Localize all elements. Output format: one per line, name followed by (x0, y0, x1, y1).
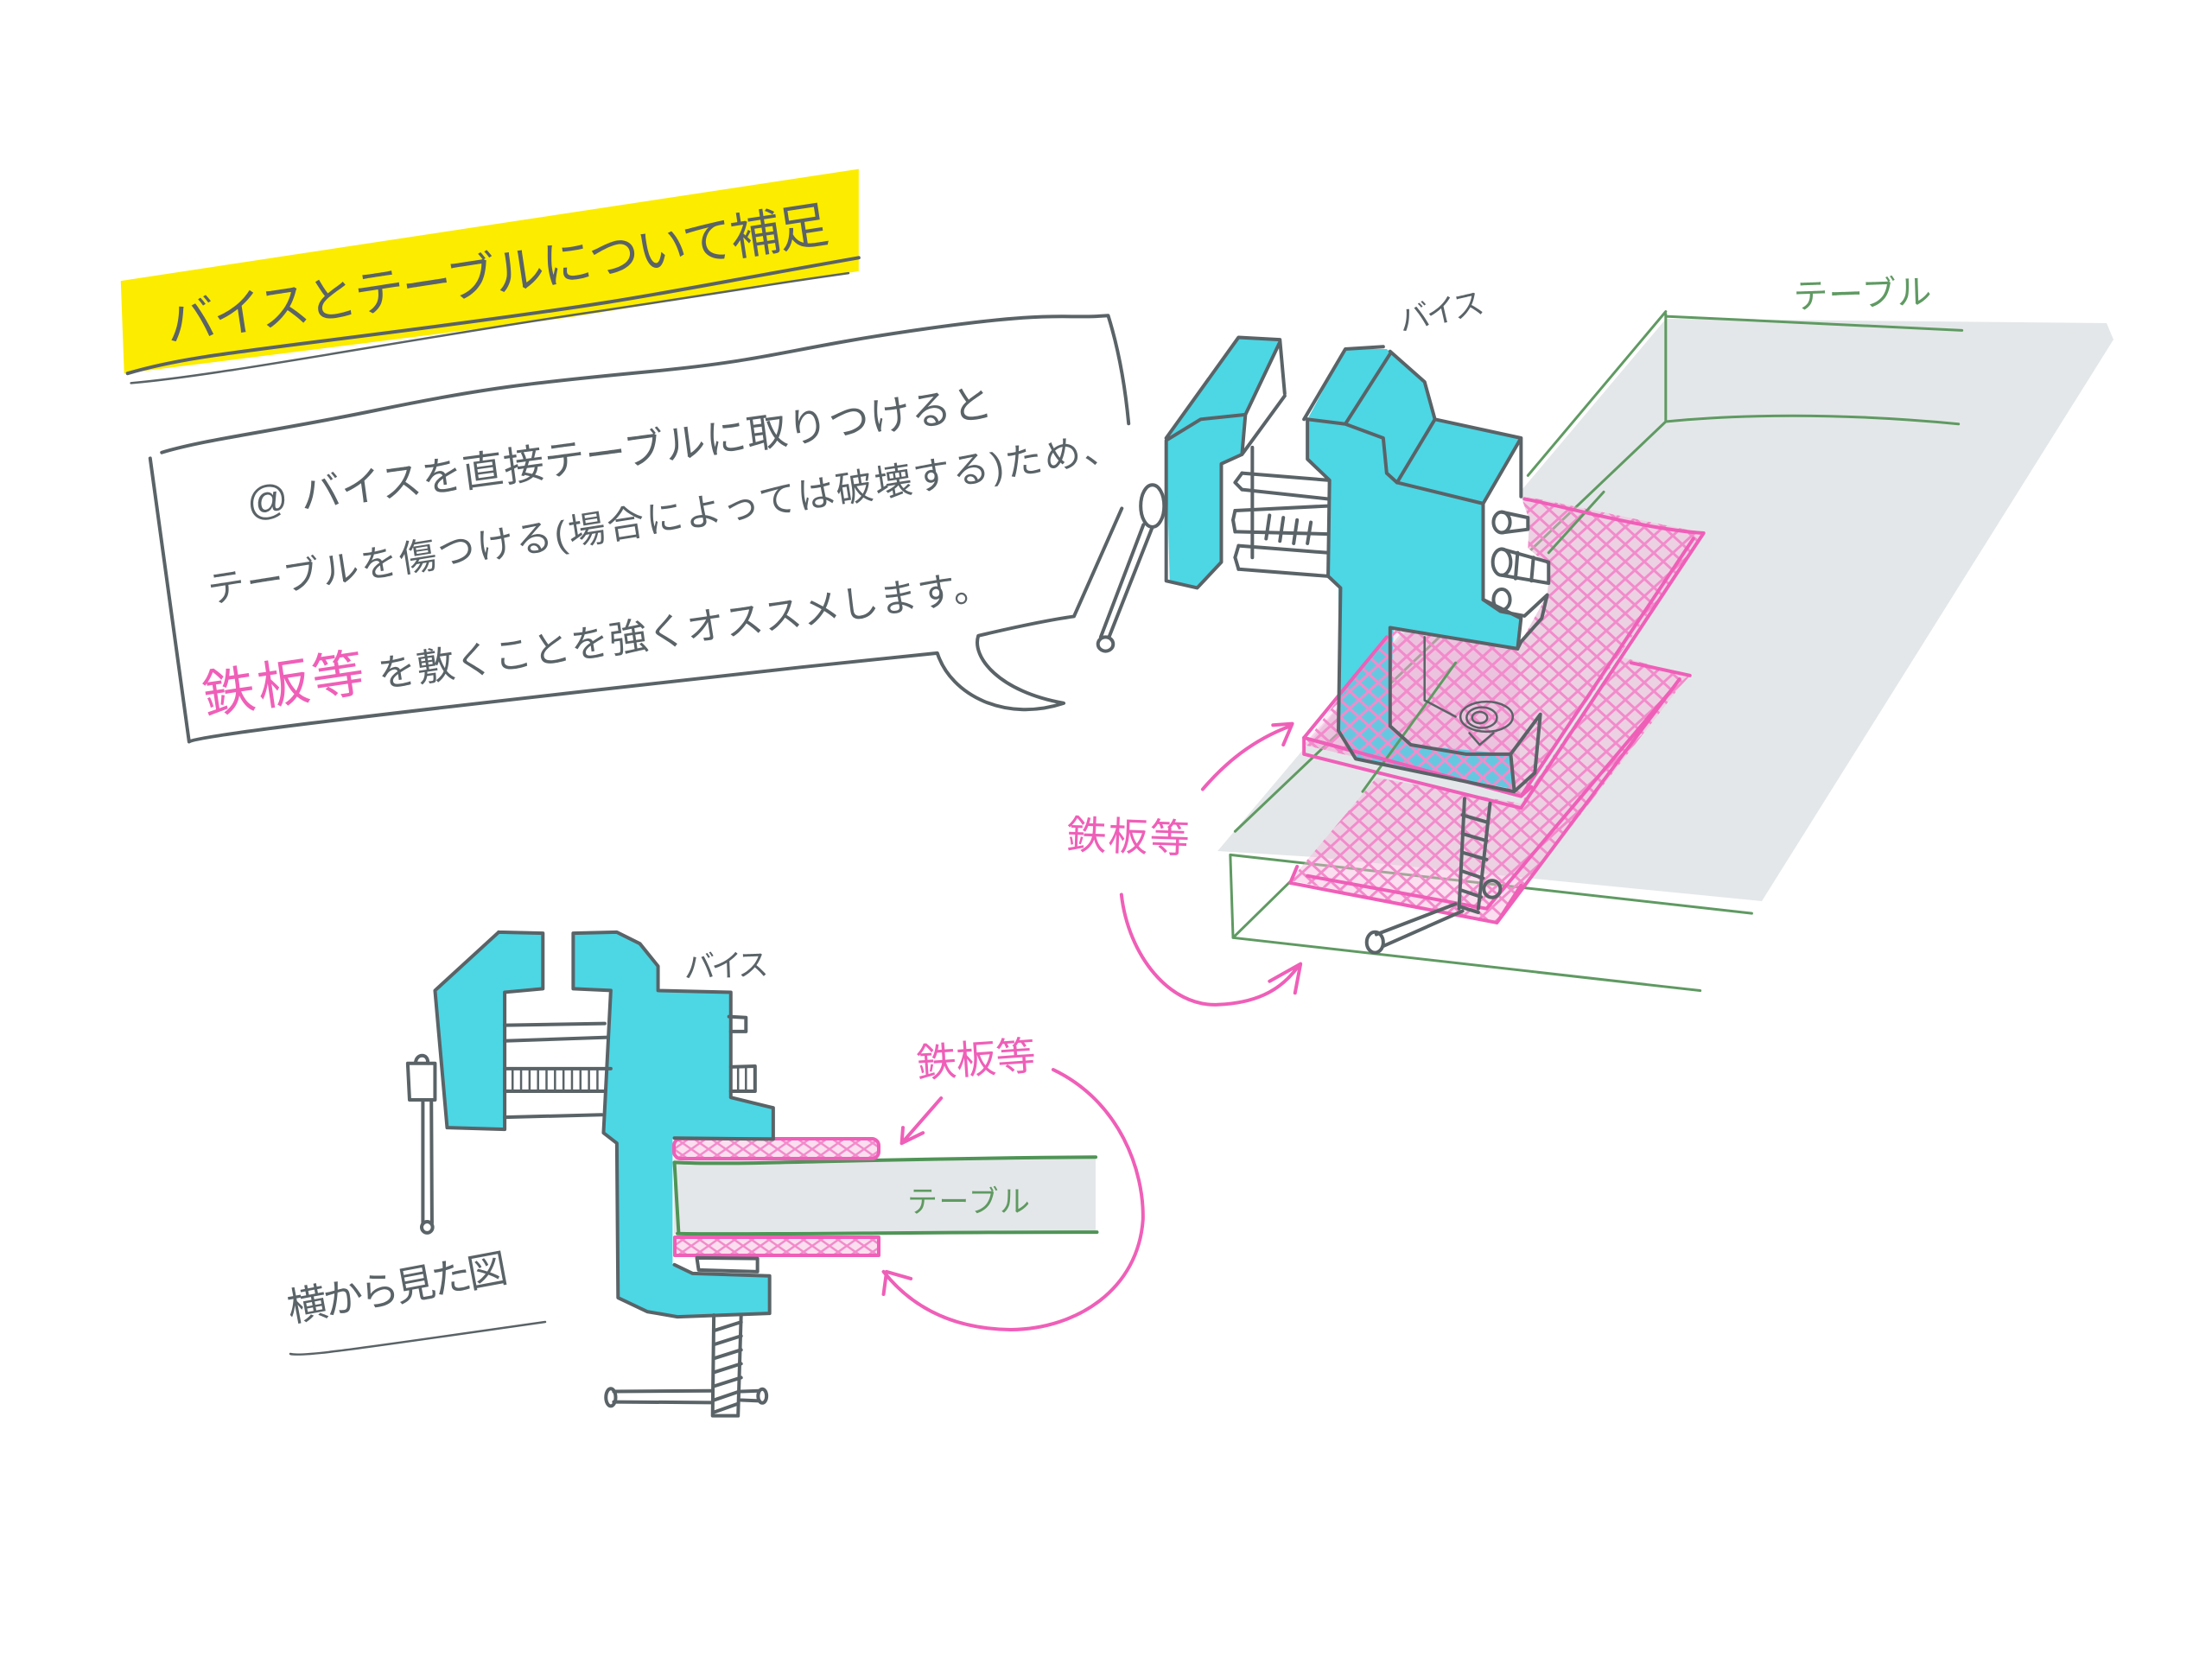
body line 3: を敷くことを強くオススメします。 (375, 564, 994, 696)
side view illustration (283, 932, 1143, 1416)
side view label: vise: バイス (683, 947, 769, 985)
side view vise body (435, 932, 773, 1317)
body line 1: @ バイスを直接テーブルに取りつけると (244, 379, 995, 525)
handle of moving jaw (1098, 485, 1164, 651)
perspective illustration: vise on table (1066, 273, 2113, 1005)
speech bubble with explanation (150, 315, 1128, 742)
label: table: テーブル (1793, 273, 1932, 316)
label: steel plate: 鉄板等 (1066, 812, 1190, 861)
hatch over lower jaw (1304, 630, 1531, 797)
table surface (1217, 319, 2113, 901)
label: vise: バイス (1395, 284, 1487, 339)
heading band: yellow title (121, 169, 859, 383)
side view upper plate (674, 1139, 879, 1160)
bubble outline (150, 315, 1128, 742)
thin inner lines and wing nut (1425, 637, 1513, 745)
bolts (1493, 512, 1510, 532)
side view thread marks (512, 1067, 746, 1091)
side view handle (408, 1056, 435, 1233)
heading text: バイスとテーブルについて補足 (162, 196, 832, 353)
body line 2: テーブルを傷つける(場合によっては破壊する)ため、 (205, 426, 1122, 612)
fixed jaw (1307, 349, 1521, 789)
upper protective plate (1304, 492, 1704, 808)
side view arrows (884, 1070, 1143, 1330)
side view clamp screw (606, 1315, 766, 1416)
vise outlines (1166, 337, 1548, 791)
side view label: table: テーブル (907, 1185, 1030, 1219)
vise body (1166, 337, 1550, 789)
arrow: lower plate pointer (1122, 894, 1300, 1005)
caption: view from the side: 横から見た図 (283, 1245, 511, 1331)
lower protective plate (1290, 657, 1690, 923)
white side panel (1483, 438, 1550, 649)
clamp screw and handle (1367, 798, 1500, 953)
side view label: steel plate: 鉄板等 (915, 1032, 1037, 1086)
yellow highlight (121, 169, 859, 383)
moving jaw (1166, 337, 1281, 588)
caption: view from the side (283, 1245, 545, 1355)
arrow: upper plate pointer (1203, 724, 1293, 789)
side view table (674, 1157, 1096, 1234)
body line 3 highlight: 鉄板等 (199, 644, 368, 725)
side view lower plate (675, 1237, 879, 1256)
table green edges (1230, 312, 1962, 991)
side view outlines (435, 932, 773, 1317)
